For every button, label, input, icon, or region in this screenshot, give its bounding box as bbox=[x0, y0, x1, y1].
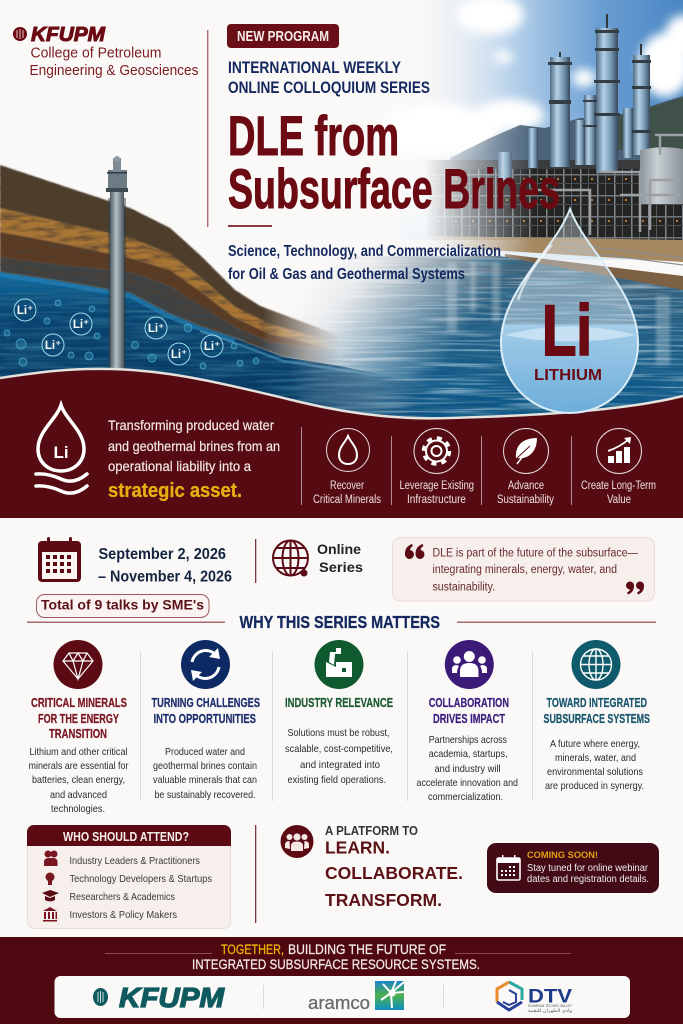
date block: – November 4, 2026 bbox=[98, 568, 232, 586]
badge: new program: NEW PROGRAM bbox=[237, 29, 329, 45]
column: critical minerals: and advanced bbox=[50, 789, 107, 801]
platform tagline: TRANSFORM. bbox=[325, 890, 442, 910]
benefit: leverage existing infrastructure: Infrastructure bbox=[407, 494, 466, 506]
column: collaboration: COLLABORATION bbox=[429, 696, 509, 710]
audience: researchers: Researchers & Academics bbox=[70, 891, 175, 903]
platform tagline bbox=[280, 824, 463, 910]
icon: lithium drop: Li bbox=[53, 443, 69, 462]
column: collaboration: accelerate innovation and bbox=[416, 777, 518, 789]
lithium ions: Li⁺ bbox=[17, 305, 33, 317]
mission statement: and geothermal brines from an bbox=[108, 438, 280, 454]
callout: quote: sustainability. bbox=[432, 582, 495, 594]
column: collaboration: academia, startups, bbox=[429, 748, 508, 760]
callout: quote: DLE is part of the future of the subsurface— bbox=[432, 548, 638, 560]
logo: aramco: aramco bbox=[308, 993, 370, 1013]
sky and clouds bbox=[380, 0, 683, 260]
column: turning challenges: be sustainably recovered. bbox=[154, 789, 256, 801]
callout: coming soon: COMING SOON! bbox=[527, 850, 598, 861]
badge: total talks bbox=[36, 594, 209, 618]
callout: quote: integrating minerals, energy, water, and bbox=[432, 564, 617, 576]
series heading: INTERNATIONAL WEEKLY bbox=[228, 59, 401, 77]
logo: aramco bbox=[308, 981, 404, 1013]
column: critical minerals bbox=[28, 640, 129, 815]
benefit: recover critical minerals: Critical Minerals bbox=[313, 494, 381, 506]
main title: DLE from bbox=[228, 104, 399, 167]
brine layer bbox=[0, 272, 430, 425]
logo: DTV: وادي الظهران للتقنية bbox=[528, 1008, 572, 1013]
logo: KFUPM College of Petroleum bbox=[13, 24, 198, 79]
icon: closing quote mark bbox=[626, 582, 644, 594]
panel: footer bbox=[0, 937, 683, 1024]
column: critical minerals: CRITICAL MINERALS bbox=[31, 696, 127, 710]
column: collaboration bbox=[416, 640, 518, 803]
benefit: leverage existing infrastructure: Leverage Existing bbox=[400, 480, 474, 492]
mission statement bbox=[108, 417, 280, 502]
column: critical minerals: minerals are essential for bbox=[28, 760, 129, 772]
series heading bbox=[228, 59, 430, 97]
panel: who should attend: WHO SHOULD ATTEND? bbox=[63, 830, 189, 844]
icon: diamond bbox=[54, 640, 102, 689]
section heading: why this series matters: WHY THIS SERIES MATTERS bbox=[240, 612, 440, 632]
series heading: ONLINE COLLOQUIUM SERIES bbox=[228, 79, 430, 97]
closing statement: BUILDING THE FUTURE OF bbox=[288, 942, 446, 957]
date block: September 2, 2026 bbox=[98, 546, 226, 563]
column: industry relevance: and integrated into bbox=[300, 759, 380, 771]
benefit: recover critical minerals: Recover bbox=[330, 480, 364, 492]
water bbox=[200, 240, 683, 430]
icon: cycle arrows bbox=[181, 640, 230, 689]
lithium water drop bbox=[501, 209, 638, 413]
logo: DTV: DTV bbox=[528, 986, 572, 1008]
column: industry relevance: Solutions must be robust, bbox=[288, 727, 390, 739]
platform tagline: A PLATFORM TO bbox=[325, 824, 418, 838]
logo: DTV bbox=[497, 982, 573, 1013]
icon: calendar bbox=[38, 537, 81, 582]
lithium ions: Li⁺ bbox=[45, 340, 61, 352]
column: critical minerals: TRANSITION bbox=[49, 727, 107, 741]
icon: group bbox=[280, 825, 314, 858]
column: industry relevance: existing field operations. bbox=[288, 774, 386, 786]
column: collaboration: Partnerships across bbox=[429, 734, 507, 746]
mission statement: strategic asset. bbox=[108, 480, 242, 502]
platform tagline: COLLABORATE. bbox=[325, 863, 463, 883]
subtitle: for Oil & Gas and Geothermal Systems bbox=[228, 266, 465, 283]
refinery and mountains bbox=[425, 14, 683, 292]
closing statement: TOGETHER, bbox=[221, 942, 284, 957]
lithium ions: Li⁺ bbox=[171, 349, 187, 361]
column: turning challenges: TURNING CHALLENGES bbox=[152, 696, 260, 710]
audience: researchers bbox=[42, 890, 175, 903]
lithium water drop: Li bbox=[542, 292, 592, 371]
benefit: advance sustainability: Sustainability bbox=[497, 494, 554, 506]
benefit: recover critical minerals bbox=[313, 428, 381, 506]
icon: opening quote mark bbox=[405, 544, 424, 559]
column: industry relevance: scalable, cost-competitive, bbox=[285, 743, 393, 755]
partner logos bbox=[54, 976, 630, 1018]
date block bbox=[38, 537, 232, 586]
hero illustration bbox=[0, 0, 683, 430]
audience: technology developers: Technology Developers & Startups bbox=[70, 873, 212, 885]
main title bbox=[228, 104, 560, 220]
audience: investors: Investors & Policy Makers bbox=[70, 909, 177, 921]
callout: quote bbox=[392, 538, 654, 601]
closing statement: INTEGRATED SUBSURFACE RESOURCE SYSTEMS. bbox=[192, 957, 480, 972]
audience: industry leaders bbox=[44, 850, 200, 867]
icon: globe bbox=[572, 640, 620, 689]
mission statement: Transforming produced water bbox=[108, 417, 274, 433]
benefit: advance sustainability: Advance bbox=[508, 480, 544, 492]
column: critical minerals: batteries, clean energy, bbox=[32, 774, 125, 786]
column: critical minerals: FOR THE ENERGY bbox=[38, 712, 119, 726]
lithium ions bbox=[4, 299, 259, 369]
lithium ions: Li⁺ bbox=[204, 341, 220, 353]
column: industry relevance: INDUSTRY RELEVANCE bbox=[285, 696, 393, 710]
column: integrated systems: TOWARD INTEGRATED bbox=[546, 696, 647, 710]
rock strata bbox=[0, 165, 340, 366]
column: turning challenges bbox=[152, 640, 260, 801]
well tower bbox=[106, 156, 128, 370]
column: integrated systems: A future where energy, bbox=[550, 738, 640, 750]
column: integrated systems bbox=[544, 640, 650, 792]
column: integrated systems: minerals, water, and bbox=[555, 752, 636, 764]
panel: who should attend bbox=[27, 825, 231, 928]
column: collaboration: DRIVES IMPACT bbox=[433, 712, 505, 726]
logo: KFUPM College of Petroleum: KFUPM bbox=[31, 24, 106, 46]
benefit: create long-term value: Value bbox=[607, 494, 631, 506]
icon: lithium drop bbox=[36, 405, 87, 493]
column: integrated systems: environmental solutions bbox=[547, 766, 643, 778]
logo: KFUPM College of Petroleum: College of Petroleum bbox=[30, 44, 162, 62]
icon: people bbox=[445, 640, 494, 689]
panel: value band bbox=[0, 369, 683, 518]
icon: calendar bbox=[497, 855, 520, 880]
badge: new program bbox=[227, 24, 339, 48]
icon: globe bbox=[273, 540, 308, 576]
subtitle bbox=[228, 243, 501, 283]
benefit: create long-term value bbox=[581, 428, 656, 506]
badge: total talks: Total of 9 talks by SME's bbox=[41, 598, 204, 612]
benefit: create long-term value: Create Long-Term bbox=[581, 480, 656, 492]
logo: KFUPM College of Petroleum: Engineering & Geosciences bbox=[30, 62, 198, 79]
callout: coming soon bbox=[487, 843, 659, 893]
benefit: advance sustainability bbox=[497, 428, 554, 506]
column: turning challenges: Produced water and bbox=[165, 746, 245, 758]
mission statement: operational liability into a bbox=[108, 458, 251, 474]
callout: coming soon: Stay tuned for online webinar bbox=[527, 863, 649, 874]
online series: Online bbox=[317, 542, 362, 557]
column: integrated systems: are produced in synergy. bbox=[545, 780, 644, 792]
logo: DTV: DHAHRAN TECHNO VALLEY bbox=[528, 1004, 573, 1008]
column: critical minerals: Lithium and other critical bbox=[30, 746, 128, 758]
callout: coming soon: dates and registration details. bbox=[527, 874, 649, 885]
column: turning challenges: geothermal brines contain bbox=[153, 760, 257, 772]
platform tagline: LEARN. bbox=[325, 838, 390, 858]
column: collaboration: commercialization. bbox=[428, 791, 503, 803]
audience: investors bbox=[43, 907, 177, 922]
column: turning challenges: INTO OPPORTUNITIES bbox=[154, 712, 256, 726]
lithium ions: Li⁺ bbox=[148, 323, 164, 335]
lithium water drop: LITHIUM bbox=[534, 367, 602, 384]
subtitle: Science, Technology, and Commercialization bbox=[228, 243, 501, 260]
column: turning challenges: valuable minerals that can bbox=[153, 774, 257, 786]
column: collaboration: and industry will bbox=[434, 763, 500, 775]
audience: industry leaders: Industry Leaders & Practitioners bbox=[70, 855, 200, 867]
icon: factory bbox=[314, 640, 364, 689]
benefit: leverage existing infrastructure bbox=[400, 428, 474, 506]
column: industry relevance bbox=[285, 640, 393, 786]
closing statement bbox=[192, 942, 480, 972]
column: critical minerals: technologies. bbox=[51, 803, 105, 815]
online series: Series bbox=[319, 560, 363, 575]
logo: KFUPM: KFUPM bbox=[119, 982, 225, 1013]
lithium ions: Li⁺ bbox=[73, 319, 89, 331]
online series bbox=[273, 540, 363, 576]
